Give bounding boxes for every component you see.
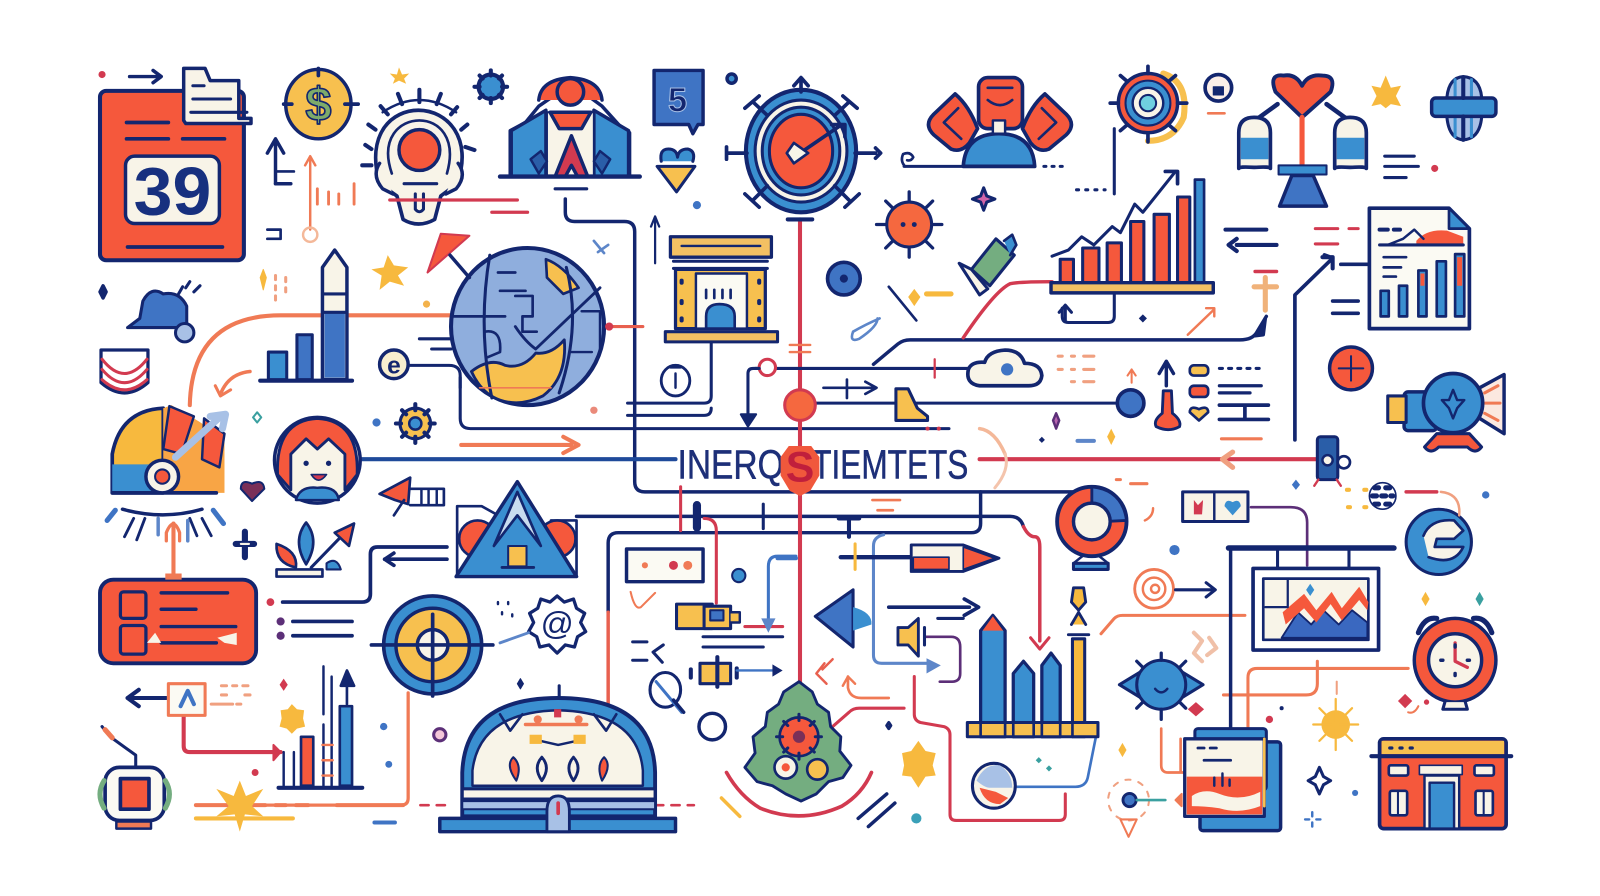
chart: tower and bars xyxy=(260,250,352,381)
icon: numbered calendar folder: 39 xyxy=(134,154,211,229)
icon: small letter coin: e xyxy=(387,353,401,380)
icon: figure in blue suit xyxy=(500,78,640,189)
icon: speech bubble with number xyxy=(654,70,703,134)
icon: blue swirl ball xyxy=(1406,492,1471,575)
icon: dollar coin xyxy=(284,68,358,139)
icon: blue triangle with red discs xyxy=(456,482,577,577)
icon: paired tiles xyxy=(1169,492,1248,555)
icon: small rings and pips xyxy=(434,679,726,741)
icon: purple star xyxy=(972,188,995,210)
icon: sparkles and yellow star xyxy=(260,255,430,308)
icon: red node and branch arrow xyxy=(741,345,877,427)
icon: clamps on lines xyxy=(697,500,900,537)
icon: yellow device xyxy=(677,569,783,647)
icon: blue virus face xyxy=(1119,653,1203,719)
icon: plug with arrow xyxy=(633,642,783,687)
icon: tree with gears xyxy=(721,682,921,827)
icon: at-sign gear: @ xyxy=(541,605,574,642)
icon: spiral with arrow xyxy=(1135,569,1215,608)
icon: globe with map xyxy=(419,248,643,405)
icon: magnifier xyxy=(650,672,684,712)
icon: concentric radial badge xyxy=(1110,66,1187,142)
icon: orange arrow xyxy=(461,437,579,453)
icon: yellow bell xyxy=(896,389,941,431)
icon: heart on balance scale xyxy=(1239,75,1438,206)
icon: numbered calendar folder xyxy=(100,68,251,260)
icon: blue triangle marker xyxy=(815,590,871,686)
icon: dashed node target xyxy=(1108,780,1182,837)
icon: docs stack xyxy=(1185,729,1281,831)
icon: small panel and orange check xyxy=(627,549,703,608)
icon: outline device on red line xyxy=(1222,437,1350,486)
icon: crosshair target xyxy=(371,596,493,696)
icon: node, flask and list xyxy=(1117,361,1268,430)
icon: yellow gear xyxy=(253,404,598,443)
icon: yellow sun spark xyxy=(887,722,936,788)
icon: small letter coin xyxy=(380,350,408,380)
icon: arch building xyxy=(665,237,778,342)
icon: cross badge xyxy=(1432,77,1496,140)
chart: rising bars with trend arrow xyxy=(1051,171,1213,322)
title: central label: INERQ xyxy=(678,442,784,488)
icon: small up arrow xyxy=(594,216,659,263)
chart: pencil tower bars xyxy=(967,588,1098,737)
icon: at-sign gear xyxy=(498,596,586,653)
icon: striped cup xyxy=(101,350,148,393)
icon: blue mound xyxy=(100,282,200,342)
icon: lightbulb with gear ticks xyxy=(362,90,474,224)
icon: red flag arrow xyxy=(428,234,469,278)
icon: spark with beams xyxy=(196,781,403,832)
icon: orange post and arrow xyxy=(1188,271,1277,336)
icon: dark heart xyxy=(241,482,264,501)
icon: leaves with arrow xyxy=(276,522,354,577)
icon: blue eyeball xyxy=(828,262,860,295)
icon: small scatter glyphs right of centre xyxy=(1039,413,1261,445)
icon: storefront xyxy=(1371,739,1511,829)
icon: dome observatory xyxy=(374,686,676,832)
icon: green bottle xyxy=(959,235,1016,295)
title: central label xyxy=(678,442,968,496)
icon: bullets for card lines xyxy=(267,553,394,640)
icon: yellow stars xyxy=(390,67,1401,108)
icon: up arrow and small bars xyxy=(267,139,528,242)
icon: speech bubble with number: 5 xyxy=(668,81,687,119)
icon: heart and funnel xyxy=(657,74,736,209)
icon: speaker with arrow xyxy=(889,599,979,674)
icon: dotted ball and dots xyxy=(1194,480,1489,661)
icon: small robot xyxy=(100,727,169,829)
icon: rocket on line xyxy=(778,544,999,571)
icon: yellow spark right xyxy=(1188,682,1429,750)
title: central label: S xyxy=(786,444,814,492)
icon: navy cross xyxy=(236,532,254,557)
icon: four-point star xyxy=(1118,743,1358,827)
chart: small bars with arrow xyxy=(128,666,392,788)
icon: small red card xyxy=(100,574,256,663)
icon: report document xyxy=(1322,208,1469,329)
icon: donut ring on base xyxy=(1057,480,1153,569)
icon: info circle xyxy=(661,365,690,396)
icon: dollar coin: $ xyxy=(305,78,331,130)
icon: central target dial xyxy=(727,78,881,219)
icon: sun face xyxy=(877,192,942,257)
icon: plus badge xyxy=(1330,347,1372,390)
connector lines network xyxy=(173,129,1408,820)
icon: arrow bundle xyxy=(380,478,444,515)
icon: red petals with dome xyxy=(902,78,1071,166)
icon: cloud with eye xyxy=(935,350,1094,386)
icon: lock badge xyxy=(1205,75,1232,113)
icon: smiling face portrait xyxy=(274,417,360,503)
icon: small arrow and dot xyxy=(98,70,161,83)
icon: exchange arrows xyxy=(1226,229,1358,251)
title: central label: TIEMTETS xyxy=(812,442,968,488)
icon: alarm clock xyxy=(1414,618,1496,709)
icon: curved orange arrow xyxy=(215,371,250,396)
chart: hanging zigzag board xyxy=(1253,550,1379,650)
icon: small connector glyphs xyxy=(852,287,951,340)
icon: gauge dial with pointer xyxy=(112,405,226,493)
icon: blue speaker robot xyxy=(1388,374,1504,451)
icon: smiling moon xyxy=(972,757,1052,808)
icon: radiating rays xyxy=(107,509,223,541)
icon: small gear xyxy=(474,70,507,103)
